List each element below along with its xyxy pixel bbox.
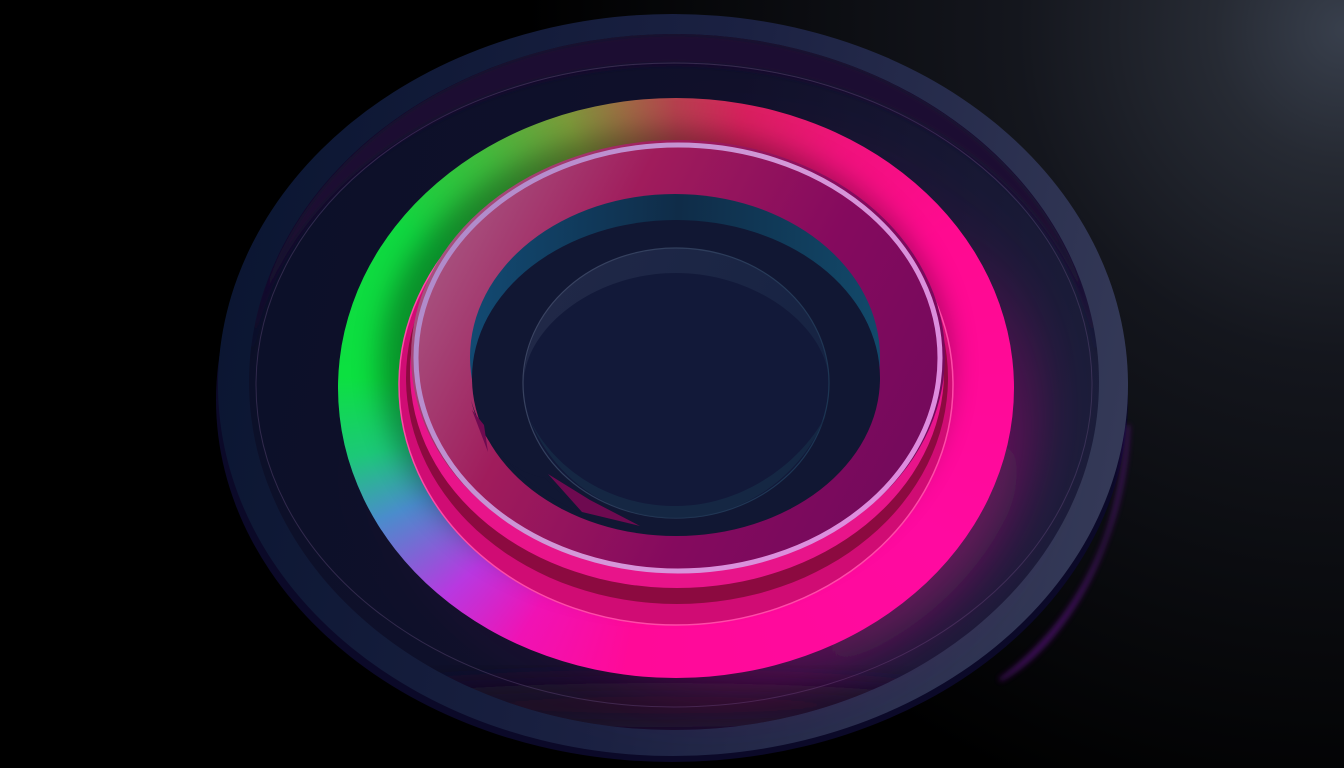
main neon ring: green to pink [338, 98, 1014, 678]
outer disc recess [249, 34, 1099, 730]
neon glow [345, 105, 1035, 695]
lower shadow disc [216, 38, 1128, 762]
lilac ring: rim and face [411, 140, 945, 572]
central opening [470, 194, 880, 536]
outer disc rim [218, 14, 1128, 756]
stacked ring layers, lower edge [399, 145, 953, 625]
inner core circle [523, 248, 829, 518]
